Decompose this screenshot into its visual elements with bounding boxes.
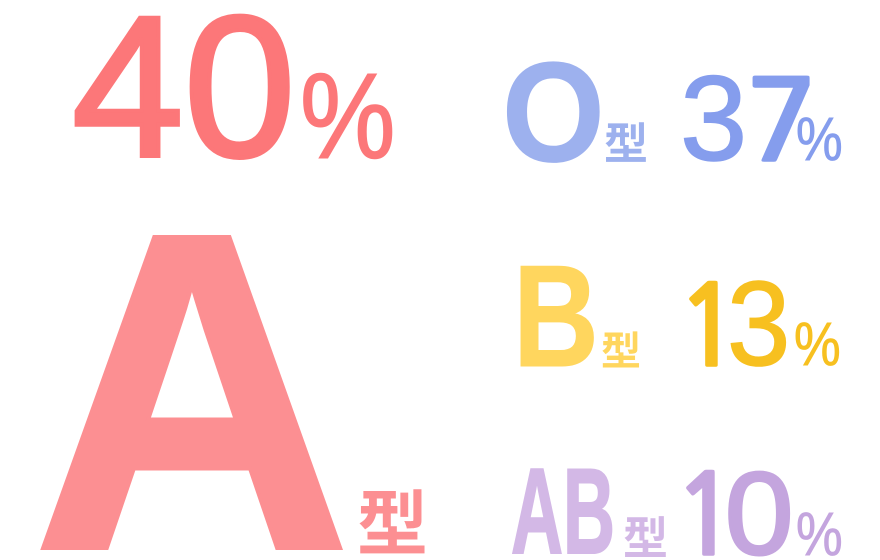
AB percentage number [672,449,793,560]
panel: type A [32,0,428,560]
panel: type O [502,34,843,192]
A percent sign: % [300,49,395,185]
B type kanji: 型 [601,319,641,377]
O letter: O [502,34,605,192]
B percentage number: 1 [675,272,743,383]
panel: type AB [511,443,843,560]
B percent sign: % [794,310,841,379]
O percentage number: 3 [680,50,747,186]
B percentage number: 3 [727,256,790,391]
B letter: B [513,236,599,398]
panel: type B [513,236,841,398]
O type kanji: 型 [604,108,648,172]
B percentage number [675,256,790,391]
O percent sign: % [796,105,843,174]
O percentage number [680,50,818,186]
O percentage number: 7 [745,68,818,178]
